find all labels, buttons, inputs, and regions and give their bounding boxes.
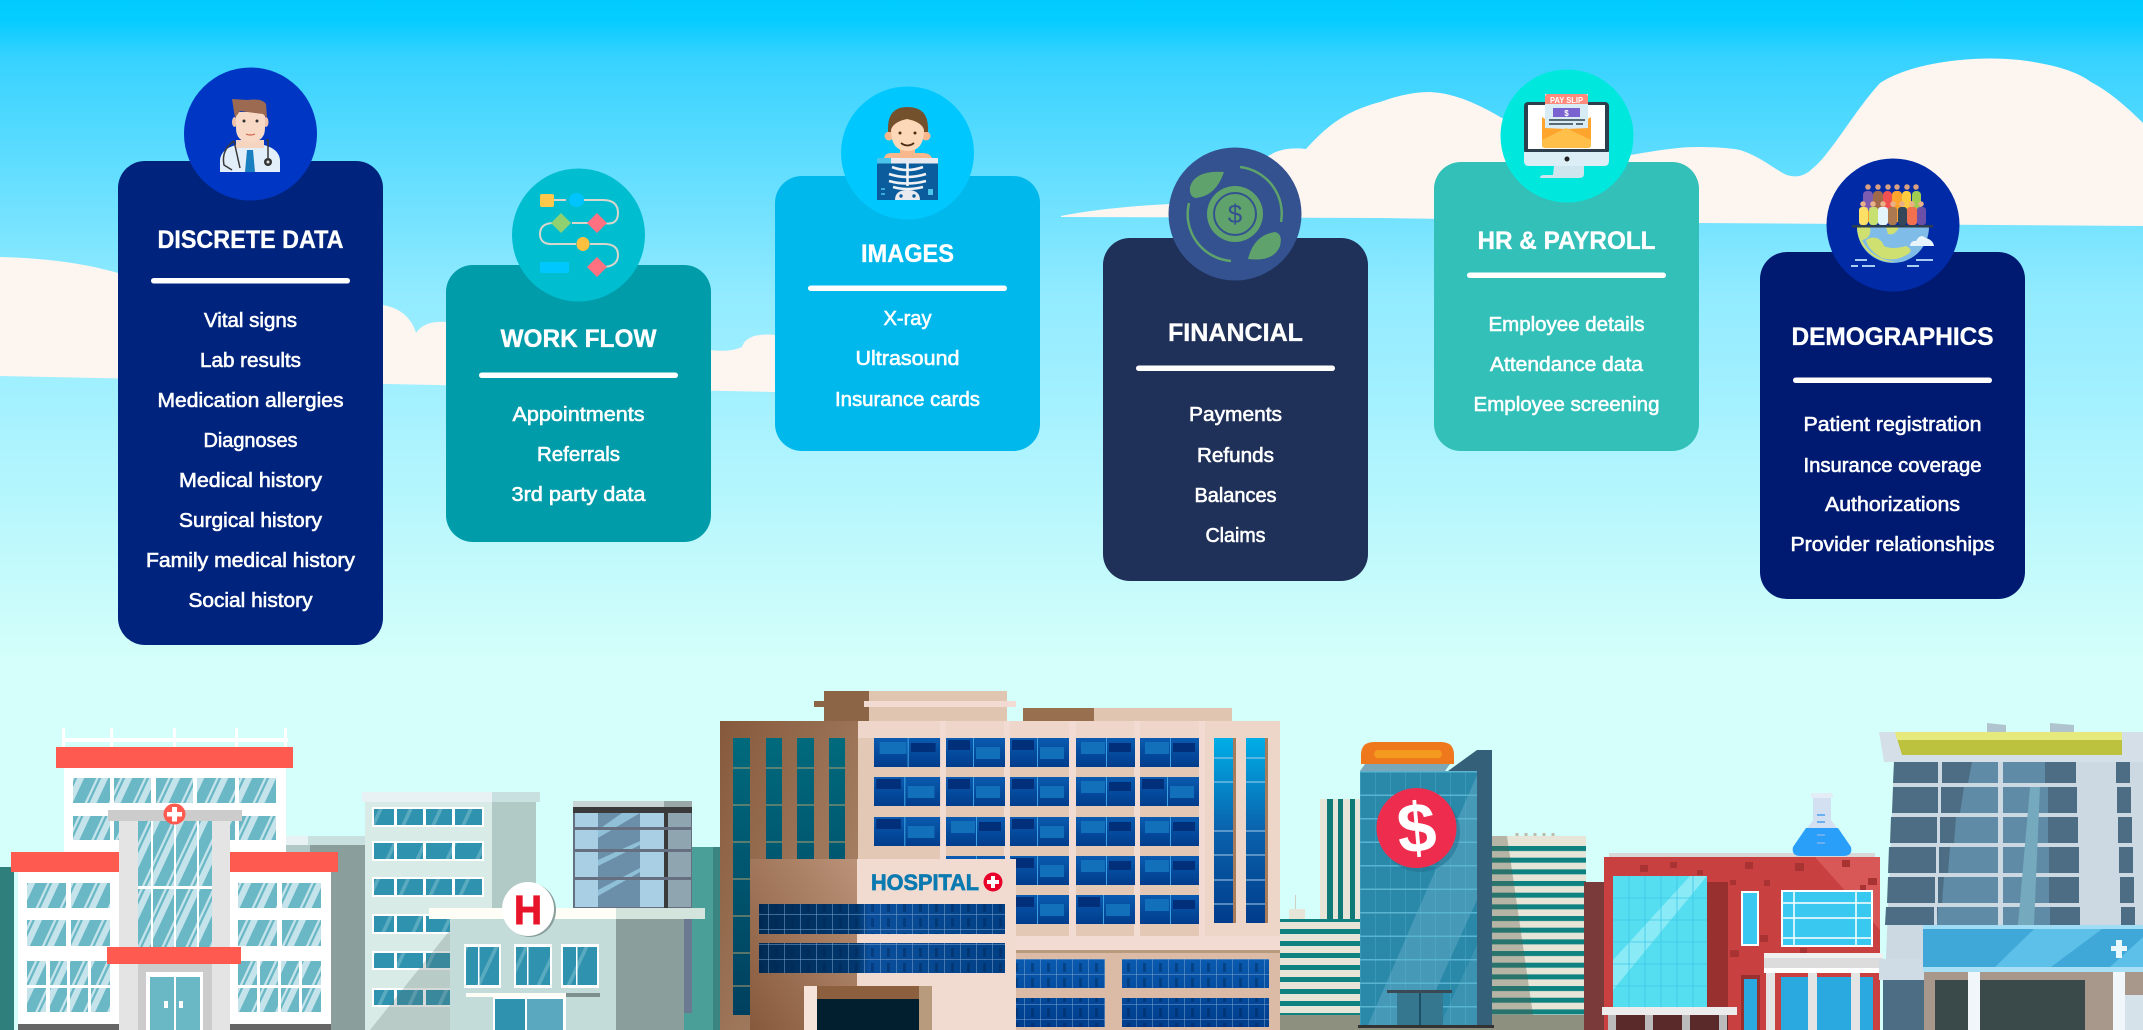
H sign <box>502 882 556 937</box>
list: Provider relationships <box>1790 534 1994 556</box>
list: Insurance coverage <box>1804 455 1982 477</box>
clinic with H sign <box>429 882 705 1030</box>
blue clinic sign <box>1923 925 2143 972</box>
bank tower with dollar sign <box>1358 742 1494 1028</box>
red cross badge <box>164 804 186 824</box>
list: Surgical history <box>179 510 322 532</box>
list <box>512 404 646 506</box>
panel: hr and payroll <box>1434 70 1699 451</box>
icon: money cycle: $ <box>1228 199 1243 229</box>
glass office tower <box>1879 723 2143 1030</box>
card background <box>775 176 1040 451</box>
red brick building <box>1584 853 1883 1030</box>
list: Ultrasound <box>856 348 960 370</box>
grey back building <box>286 836 365 1030</box>
list: Medical history <box>179 470 322 492</box>
low striped building <box>1280 919 1640 1030</box>
list: Family medical history <box>146 550 355 572</box>
list: Payments <box>1189 404 1282 426</box>
icon: workflow <box>512 168 645 302</box>
heading: WORK FLOW <box>500 325 657 353</box>
panel: images <box>775 86 1040 451</box>
heading: FINANCIAL <box>1168 319 1303 347</box>
list: Attendance data <box>1490 354 1644 376</box>
list: Medication allergies <box>158 390 344 412</box>
left cloud <box>0 257 775 392</box>
card background <box>1103 238 1368 581</box>
list: Referrals <box>537 444 620 466</box>
panel: discrete data <box>118 68 383 645</box>
heading: DISCRETE DATA <box>158 226 344 254</box>
icon: pay slip monitor <box>1500 70 1634 202</box>
icon: doctor <box>184 68 317 200</box>
list <box>835 308 980 411</box>
icon: x-ray <box>841 86 974 220</box>
list: Insurance cards <box>835 389 980 411</box>
list: X-ray <box>884 308 932 330</box>
card background <box>1760 252 2025 599</box>
right cloud <box>1061 58 2143 226</box>
dollar badge <box>1376 787 1460 872</box>
icon: pay slip monitor: $ <box>1564 109 1569 118</box>
dollar badge: $ <box>1394 787 1439 869</box>
flask <box>1793 793 1851 856</box>
list: Balances <box>1194 485 1276 507</box>
list <box>1790 414 1994 556</box>
list: Employee details <box>1488 314 1644 336</box>
list: Appointments <box>512 404 644 426</box>
dark glass building <box>573 801 692 1013</box>
list: Vital signs <box>204 310 297 332</box>
heading: DEMOGRAPHICS <box>1792 323 1994 351</box>
HOSPITAL sign: HOSPITAL <box>871 870 979 895</box>
panel: financial <box>1103 148 1368 581</box>
card background <box>1434 162 1699 451</box>
list: Employee screening <box>1474 394 1660 416</box>
card background <box>446 265 711 542</box>
far back teal buildings <box>0 847 720 1030</box>
list: Refunds <box>1197 445 1274 467</box>
list <box>1474 314 1660 416</box>
icon: pay slip monitor: PAY SLIP <box>1550 96 1584 105</box>
tall pale building <box>362 792 540 1030</box>
list: Lab results <box>200 350 301 372</box>
right striped building <box>1492 833 1586 1015</box>
list: Social history <box>188 590 312 612</box>
card background <box>118 161 383 645</box>
large tan hospital <box>720 691 1297 1030</box>
panel: work flow <box>446 168 711 542</box>
list: 3rd party data <box>512 484 646 506</box>
list: Patient registration <box>1804 414 1982 436</box>
heading: HR & PAYROLL <box>1478 227 1656 255</box>
icon: people on globe <box>1826 158 1960 292</box>
skyline of buildings <box>0 691 2143 1030</box>
list: Diagnoses <box>204 430 298 452</box>
white red-roofed hospital <box>11 728 338 1030</box>
list: Authorizations <box>1825 494 1960 516</box>
list <box>1189 404 1282 547</box>
icon: money cycle <box>1168 148 1302 280</box>
panel: demographics <box>1760 158 2025 599</box>
list: Claims <box>1206 525 1266 547</box>
list <box>146 310 355 612</box>
H sign: H <box>514 887 542 933</box>
back striped tower <box>1289 799 1360 920</box>
heading: IMAGES <box>861 240 954 268</box>
